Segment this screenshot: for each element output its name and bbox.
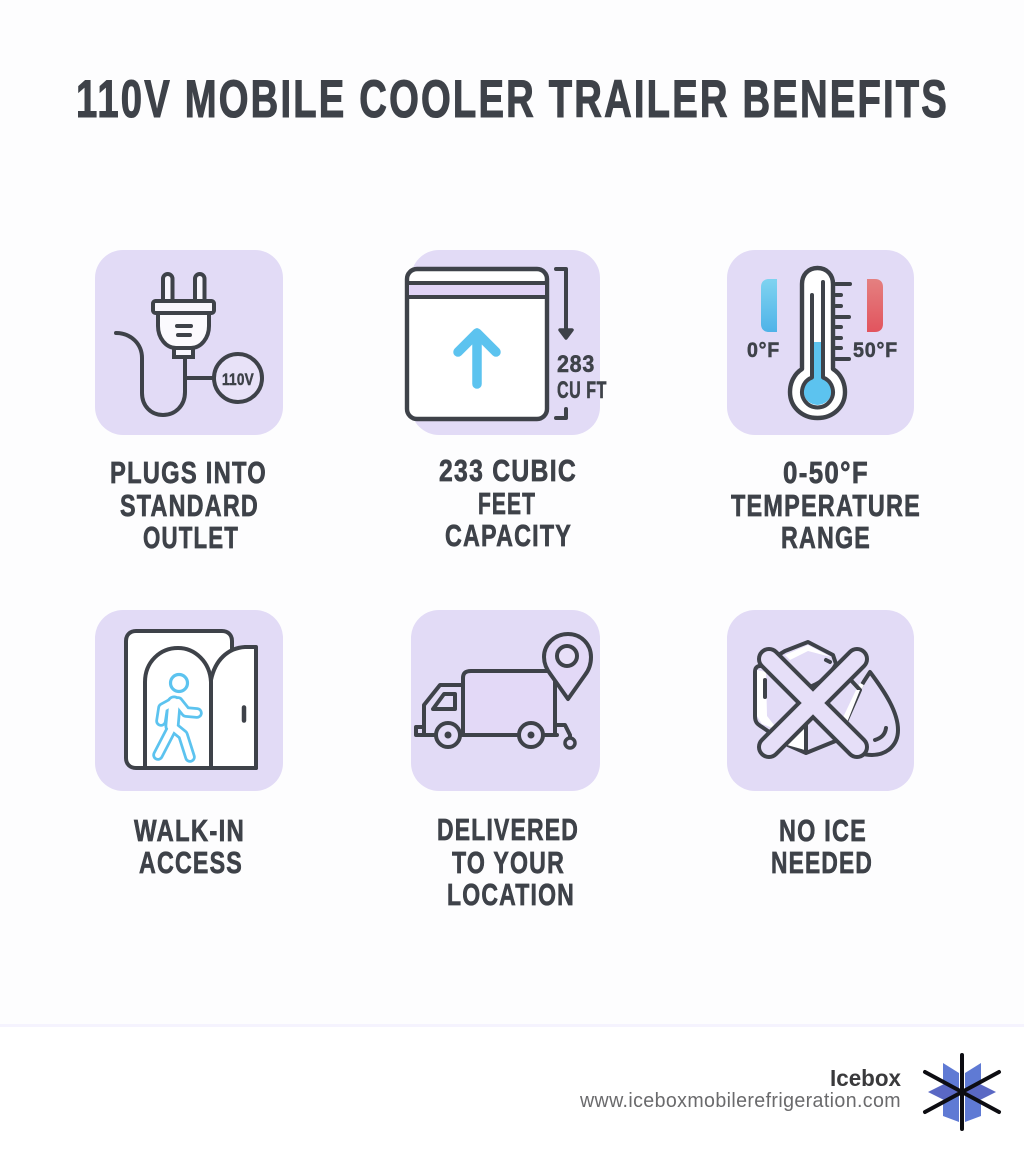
- card background: no ice: [727, 610, 914, 791]
- label: walk-in access: ACCESS: [139, 845, 243, 880]
- label: no ice needed: NEEDED: [771, 845, 873, 880]
- card background: capacity: [411, 250, 600, 435]
- label: 0-50F temperature range: [731, 455, 921, 555]
- panel: delivered to your location: [411, 610, 600, 912]
- icon: delivery truck: [416, 671, 575, 748]
- label: plugs into standard outlet: STANDARD: [120, 488, 259, 523]
- icon: location pin: [544, 634, 591, 699]
- hot range marker: [853, 279, 898, 362]
- icon: crossed-out ice and water drop: [755, 642, 898, 755]
- icon: plug with 110V badge: 110V: [222, 371, 254, 389]
- label: delivered to your location: LOCATION: [447, 877, 575, 912]
- label: no ice needed: NO ICE: [779, 813, 867, 848]
- label: 233 cubic feet capacity: CAPACITY: [445, 518, 572, 553]
- panel: plugs into standard outlet: [95, 250, 283, 555]
- brand name: Icebox: [830, 1065, 901, 1091]
- card background: plug: [95, 250, 283, 435]
- icon: walking person: [158, 674, 197, 757]
- label: walk-in access: WALK-IN: [134, 813, 245, 848]
- website url: www.iceboxmobilerefrigeration.com: [579, 1089, 901, 1112]
- label: plugs into standard outlet: OUTLET: [143, 520, 239, 555]
- dimension marker: 283 cu ft: 283: [557, 351, 595, 378]
- label: delivered to your location: [437, 812, 579, 912]
- label: 233 cubic feet capacity: FEET: [478, 486, 536, 521]
- cold range marker: [747, 279, 780, 362]
- panel: walk-in access: [95, 610, 283, 880]
- hot range marker: 50°F: [853, 339, 898, 362]
- panel: 0-50F temperature range: [727, 250, 921, 555]
- panel: 233 cubic feet capacity: [407, 250, 607, 553]
- label: 0-50F temperature range: 0-50°F: [783, 455, 869, 490]
- card background: delivery: [411, 610, 600, 791]
- icon: walk-in door with person: [126, 631, 256, 768]
- cold range marker: 0°F: [747, 339, 780, 362]
- label: plugs into standard outlet: [110, 455, 267, 555]
- label: 233 cubic feet capacity: [439, 453, 577, 553]
- icon: icebox snowflake logo: [925, 1055, 999, 1129]
- card background: temperature: [727, 250, 914, 435]
- dimension marker: 283 cu ft: [556, 269, 607, 418]
- label: walk-in access: [134, 813, 245, 880]
- icon: plug with 110V badge: [116, 274, 262, 415]
- label: 233 cubic feet capacity: 233 CUBIC: [439, 453, 577, 488]
- label: delivered to your location: TO YOUR: [452, 845, 565, 880]
- card background: walk-in: [95, 610, 283, 791]
- label: plugs into standard outlet: PLUGS INTO: [110, 455, 267, 490]
- label: no ice needed: [771, 813, 873, 880]
- label: 0-50F temperature range: RANGE: [781, 520, 871, 555]
- icon: thermometer: [790, 268, 850, 418]
- label: 0-50F temperature range: TEMPERATURE: [731, 488, 921, 523]
- panel: no ice needed: [727, 610, 914, 880]
- label: delivered to your location: DELIVERED: [437, 812, 579, 847]
- dimension marker: 283 cu ft: CU FT: [557, 377, 607, 404]
- footer: [0, 1024, 1024, 1154]
- icon: cooler box with up arrow: [407, 269, 547, 419]
